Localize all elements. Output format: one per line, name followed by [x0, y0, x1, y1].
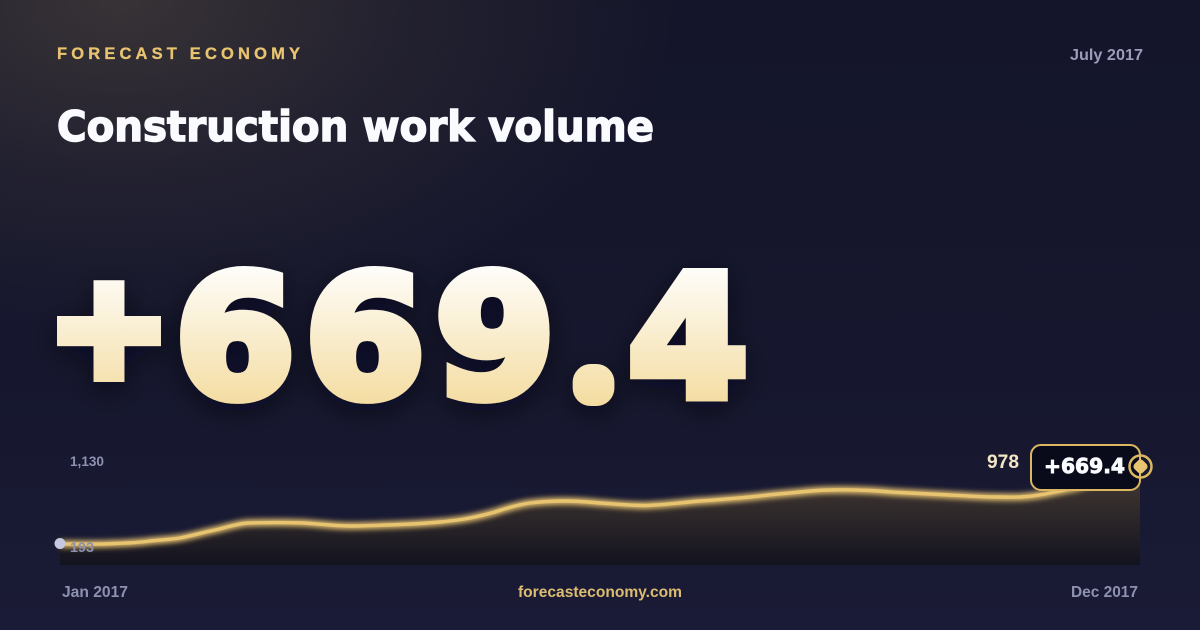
big headline value: 9 — [435, 240, 555, 436]
title: Construction work volume — [57, 102, 654, 151]
source url: forecasteconomy.com — [518, 584, 682, 601]
axis min label: 193 — [70, 539, 94, 555]
axis max label: 1,130 — [70, 453, 104, 469]
big headline value: 6 — [175, 240, 295, 436]
brand label: FORECAST ECONOMY — [57, 45, 300, 63]
line chart — [54, 466, 1140, 565]
end marker — [1130, 456, 1152, 478]
big headline value — [49, 240, 748, 436]
callout pill — [1031, 445, 1140, 490]
date label: July 2017 — [1070, 47, 1143, 64]
line glow — [60, 466, 1140, 544]
end value label: 978 — [987, 452, 1019, 473]
big headline value: 6 — [305, 240, 425, 436]
line — [60, 466, 1140, 544]
x axis end label: Dec 2017 — [1071, 584, 1138, 601]
big headline value: . — [588, 353, 599, 397]
x axis start label: Jan 2017 — [62, 584, 128, 601]
big headline value: + — [49, 246, 169, 409]
area fill — [60, 466, 1140, 565]
callout pill: +669.4 — [1044, 454, 1125, 478]
start marker — [54, 538, 66, 549]
big headline value: 4 — [628, 240, 748, 436]
